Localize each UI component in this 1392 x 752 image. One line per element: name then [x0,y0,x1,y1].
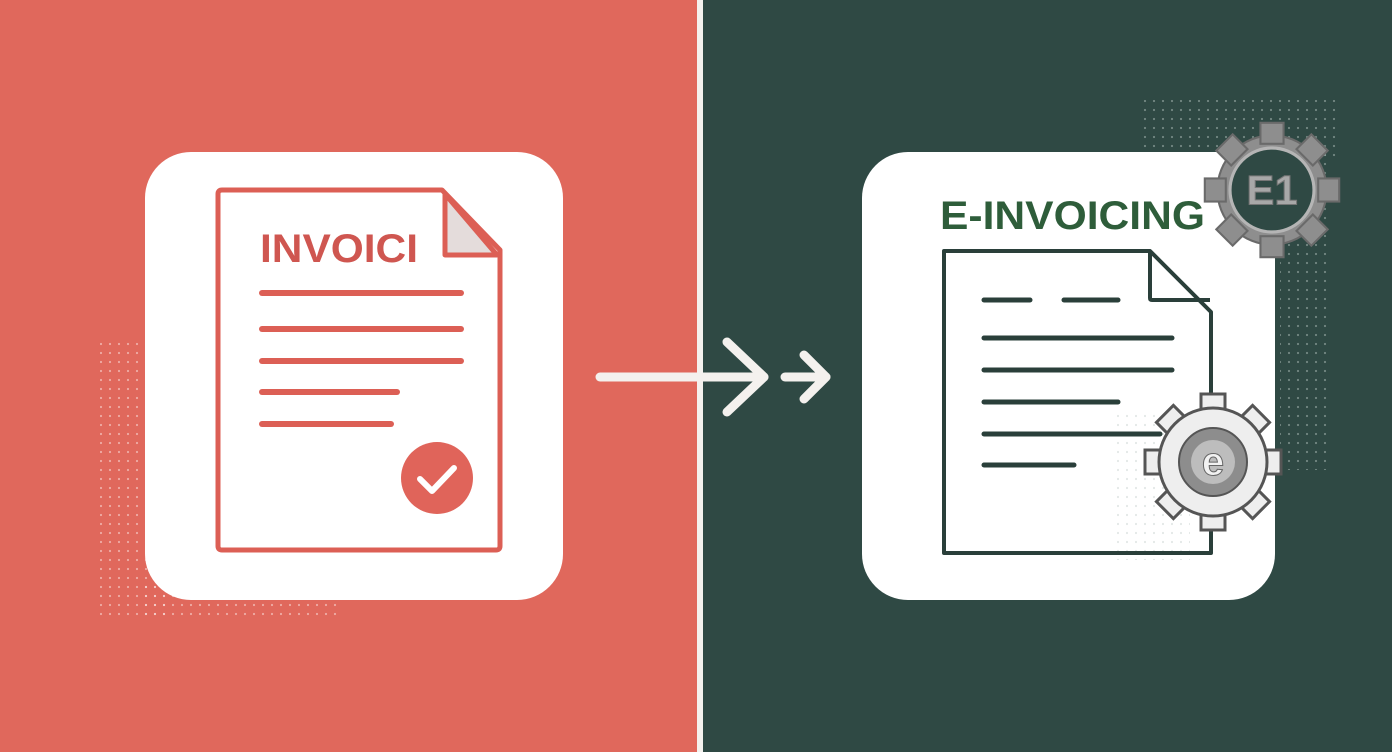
panel: right background [700,0,1392,752]
arrow: transition arrows [600,342,826,412]
panel: right card e-invoicing [862,152,1275,600]
panel: left card invoice [145,152,563,600]
heading: INVOICI: INVOICI [260,227,418,271]
panel: left background [0,0,700,752]
icon: E1 gear [1205,123,1339,257]
icon: e gear: e [1202,440,1224,484]
icon: digital document [944,251,1211,553]
icon: E1 gear: E1 [1246,167,1298,214]
icon: check circle [401,442,473,514]
icon: paper invoice document [218,190,500,550]
icon: e gear [1145,394,1281,530]
heading: E-INVOICING: E-INVOICING [940,194,1205,238]
